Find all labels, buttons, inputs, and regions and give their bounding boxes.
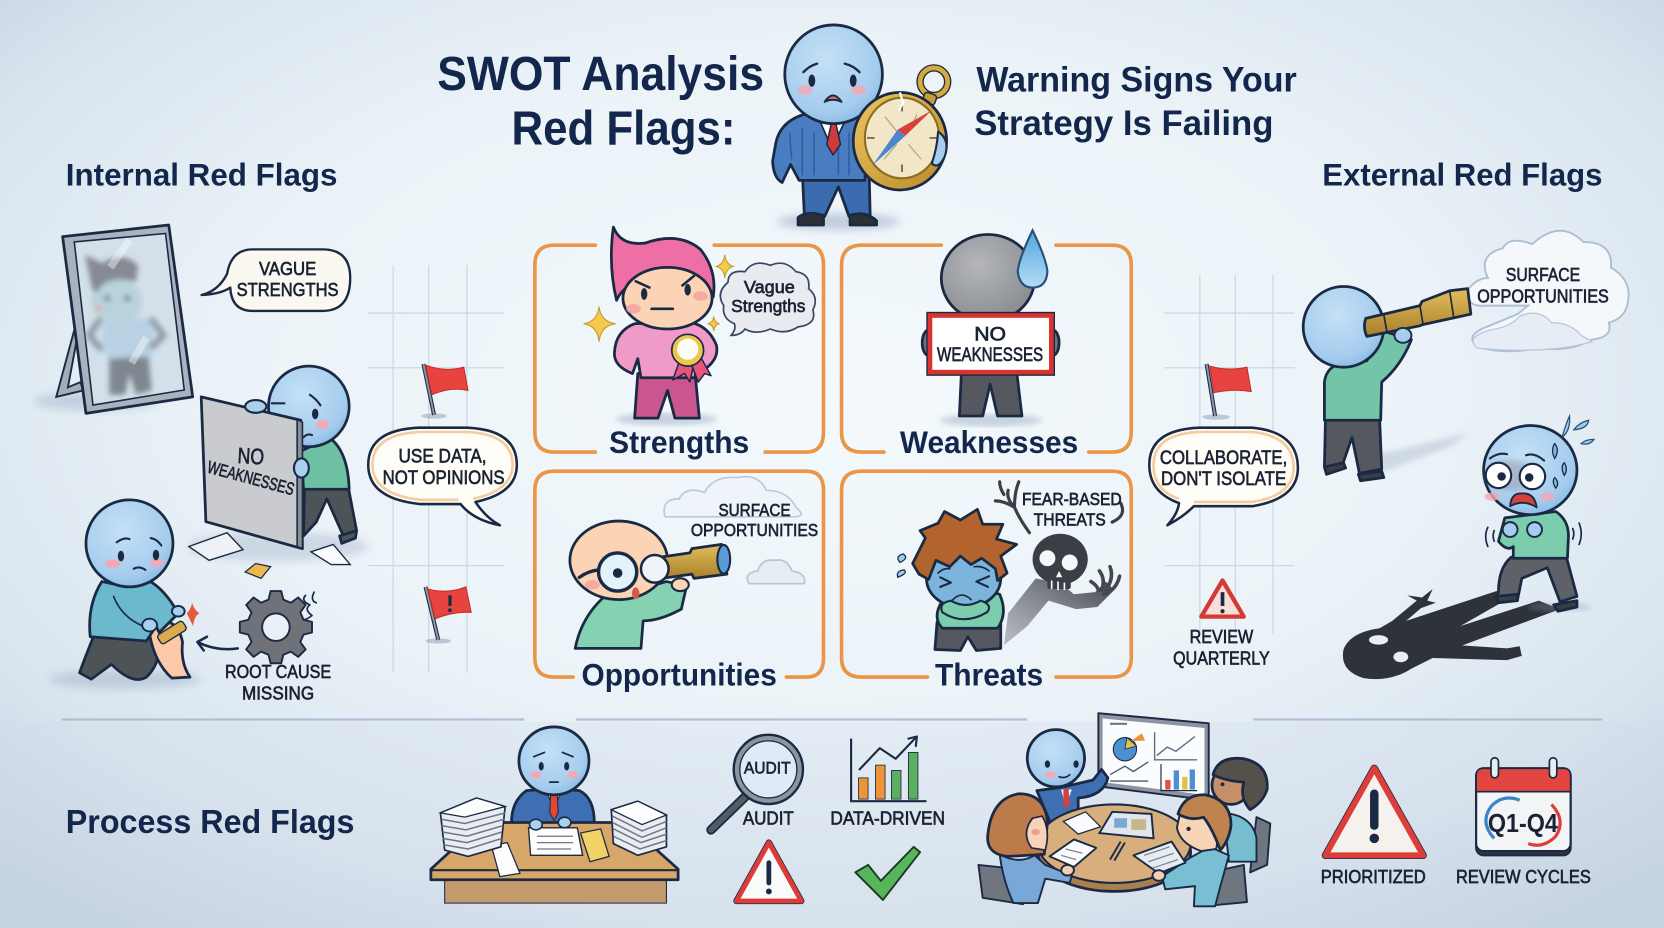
character scared with monster shadow [1343,416,1594,679]
icon: red flag [421,364,468,419]
thought cloud: vague strengths: Strengths [731,296,806,316]
shadow skull monster [995,482,1123,645]
meeting around table with chart board [978,713,1270,906]
label: data-driven: DATA-DRIVEN [830,808,945,829]
label: weaknesses: Weaknesses [900,424,1078,460]
label: review quarterly: QUARTERLY [1173,647,1270,668]
label: review quarterly: REVIEW [1190,626,1254,647]
character at desk with paper stacks [431,727,678,903]
panel: weaknesses [842,230,1131,460]
mirror with blurred reflection [34,225,193,413]
character: weaknesses with no-weaknesses sign [922,235,1059,427]
character: opportunities with telescope [570,521,730,648]
label: root cause missing [225,661,331,703]
chart: data-driven bars and trend [851,736,926,801]
title: Red Flags: [512,102,735,155]
speech bubble: use data not opinions [368,428,517,525]
frame: weaknesses [842,245,1131,452]
label: fear-based threats: THREATS [1034,509,1106,529]
icon: warning triangle review quarterly [1201,580,1244,617]
title: SWOT Analysis [437,48,764,101]
icon: broken gear [240,591,316,663]
speech bubble: vague strengths [202,249,350,311]
label: review quarterly [1173,626,1270,668]
label: prioritized: PRIORITIZED [1321,867,1426,887]
icon: review calendar q1-q4: Q1-Q4 [1488,810,1559,838]
arrow: root cause to symptom [197,637,238,651]
icon: audit magnifier [711,738,800,830]
icon: sweat drop [1018,230,1047,288]
label: opportunities: Opportunities [582,657,777,693]
character kneeling with band-aid [49,500,202,689]
thought cloud: vague strengths: Vague [744,277,795,297]
icon: big warning triangle [1325,768,1423,855]
icon: sparkles [584,255,733,342]
decorative clouds with surface opportunities text: SURFACE [718,500,791,520]
icon: red flag with exclamation [426,587,471,644]
cloud: surface opportunities: OPPORTUNITIES [1477,286,1609,306]
frame: threats [842,471,1131,677]
panel: strengths [535,227,824,460]
icon: green check [855,847,920,900]
heading: external red flags: External Red Flags [1322,157,1602,193]
character hiding behind no-weaknesses board: WEAKNESSES [205,457,297,499]
heading: internal red flags: Internal Red Flags [66,157,337,193]
decorative clouds with surface opportunities text: OPPORTUNITIES [691,520,818,540]
frame: opportunities [535,471,824,677]
icon: audit magnifier: AUDIT [744,759,791,778]
speech bubble: collaborate don't isolate: DON'T ISOLATE [1161,468,1286,490]
thought cloud: vague strengths [720,263,815,335]
speech bubble: vague strengths: VAGUE [259,258,316,279]
cloud: surface opportunities [1468,231,1629,351]
label: audit: AUDIT [743,808,794,829]
subtitle [974,60,1297,143]
speech bubble: vague strengths: STRENGTHS [237,279,339,300]
cloud: surface opportunities: SURFACE [1506,265,1580,285]
speech bubble: collaborate don't isolate [1149,428,1298,525]
icon: small warning triangle [736,843,801,901]
icon: review calendar q1-q4 [1476,758,1571,855]
subtitle: Warning Signs Your [976,60,1297,99]
label: fear-based threats [1022,489,1122,529]
central character with cracked compass [773,25,948,230]
heading: process red flags: Process Red Flags [66,803,354,840]
label: strengths: Strengths [609,424,749,460]
character hiding behind no-weaknesses board [188,366,368,578]
character hiding behind no-weaknesses board: NO [237,443,265,469]
label: threats: Threats [935,657,1043,693]
label: root cause missing: MISSING [242,682,314,703]
label: fear-based threats: FEAR-BASED [1022,489,1122,509]
panel: opportunities [535,471,824,693]
icon: red flag right [1202,364,1251,420]
decorative clouds with surface opportunities text [664,477,818,584]
character: weaknesses with no-weaknesses sign: NO [974,325,1006,346]
character: strengths with ribbon [611,227,717,426]
frame: strengths [535,245,824,452]
speech bubble: collaborate don't isolate: COLLABORATE, [1160,447,1287,469]
label: review cycles: REVIEW CYCLES [1456,867,1591,887]
panel: threats [842,471,1131,693]
character: weaknesses with no-weaknesses sign: WEAKNESSES [937,345,1043,366]
title [437,48,764,155]
speech bubble: use data not opinions: USE DATA, [398,446,487,468]
subtitle: Strategy Is Failing [974,104,1273,143]
character looking through telescope [1303,287,1471,481]
label: root cause missing: ROOT CAUSE [225,661,331,682]
speech bubble: use data not opinions: NOT OPINIONS [383,467,505,489]
character: threats huddled [897,509,1017,651]
